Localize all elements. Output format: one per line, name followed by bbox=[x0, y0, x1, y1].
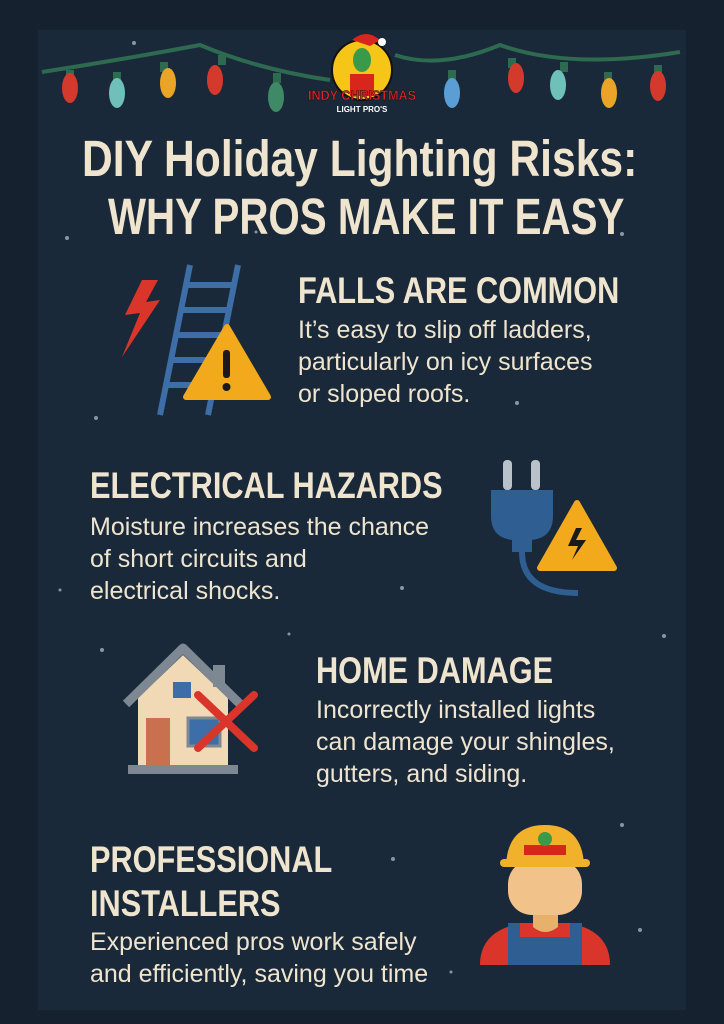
text: home damage: can damage your shingles, bbox=[316, 728, 615, 756]
text: electrical: electrical shocks. bbox=[90, 577, 280, 605]
text: professional bbox=[90, 928, 428, 988]
text: electrical: of short circuits and bbox=[90, 545, 307, 573]
text: home damage: gutters, and siding. bbox=[316, 760, 527, 788]
icon: house with X bbox=[123, 644, 258, 774]
logo: LIGHT PRO'S bbox=[337, 105, 388, 114]
section: falls bbox=[298, 270, 619, 408]
text: falls: It’s easy to slip off ladders, bbox=[298, 316, 592, 344]
string of lights bbox=[42, 42, 680, 112]
heading: professional bbox=[90, 839, 332, 924]
text: electrical bbox=[90, 513, 429, 605]
heading: falls: FALLS ARE COMMON bbox=[298, 270, 619, 311]
text: professional: Experienced pros work safely bbox=[90, 928, 417, 956]
section: professional installers bbox=[90, 839, 428, 988]
icon: ladder with warning bbox=[122, 264, 271, 416]
title bbox=[82, 130, 637, 245]
heading: electrical: ELECTRICAL HAZARDS bbox=[90, 465, 443, 506]
text: falls: or sloped roofs. bbox=[298, 380, 470, 408]
heading: professional: INSTALLERS bbox=[90, 883, 281, 924]
title: WHY PROS MAKE IT EASY bbox=[108, 188, 624, 245]
text: professional: and efficiently, saving you time bbox=[90, 960, 428, 988]
text: home damage: Incorrectly installed lights bbox=[316, 696, 595, 724]
title: DIY Holiday Lighting Risks: bbox=[82, 130, 637, 187]
logo bbox=[308, 34, 416, 114]
icon: plug with warning bbox=[491, 460, 617, 596]
heading: professional: PROFESSIONAL bbox=[90, 839, 332, 880]
text: falls: particularly on icy surfaces bbox=[298, 348, 593, 376]
text: electrical: Moisture increases the chance bbox=[90, 513, 429, 541]
icon: installer worker bbox=[480, 825, 610, 965]
text: falls bbox=[298, 316, 593, 408]
text: home damage bbox=[316, 696, 615, 788]
heading: home damage: HOME DAMAGE bbox=[316, 650, 553, 691]
section: electrical bbox=[90, 465, 443, 605]
section: home damage bbox=[316, 650, 615, 788]
